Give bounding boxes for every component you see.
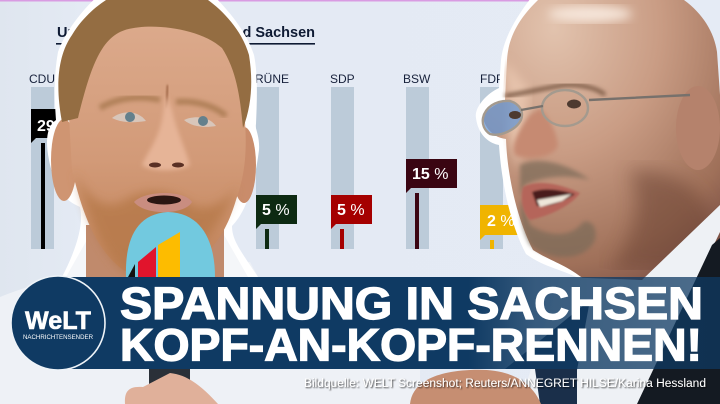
photo: right politician [410, 0, 720, 404]
headline [120, 278, 703, 370]
shirt [520, 205, 720, 404]
logo subtitle: NACHRICHTENSENDER [23, 334, 94, 341]
tie [505, 300, 590, 404]
neck [86, 225, 224, 278]
eyes [112, 112, 216, 127]
mouth [522, 183, 580, 220]
eyes [509, 100, 581, 119]
collar left [66, 238, 96, 277]
right hand [410, 370, 541, 404]
bar: CDU [29, 72, 75, 249]
hand [125, 373, 218, 404]
headline line one: SPANNUNG IN SACHSEN [120, 278, 703, 329]
bar: SDP: 5 % [337, 202, 365, 219]
bar: BSW: BSW [403, 72, 431, 86]
bar: Grüne: 5 % [262, 202, 290, 219]
head skin [483, 0, 720, 280]
chart heading [56, 25, 315, 45]
top accent line [0, 0, 720, 2]
eyebrow shading [505, 85, 605, 96]
headline line two: KOPF-AN-KOPF-RENNEN! [120, 320, 702, 370]
hair [58, 0, 251, 128]
forehead crease [166, 85, 168, 108]
nose [514, 108, 558, 158]
headline banner [58, 277, 720, 369]
mouth [134, 193, 192, 212]
ear left [51, 119, 77, 201]
nose [142, 95, 190, 170]
photo: left politician [0, 0, 420, 404]
bar: CDU: CDU [29, 72, 55, 86]
WELT logo [11, 276, 105, 370]
face [68, 20, 246, 275]
bar: FDP: 2 % [487, 213, 515, 230]
chart heading: Umfragen [57, 25, 125, 41]
shirt and body [0, 262, 420, 404]
bar: BSW [403, 72, 457, 249]
moustache and goatee [520, 161, 596, 257]
microphone [126, 212, 215, 277]
bar: SDP [330, 72, 372, 249]
logo wordmark: WeLT [25, 307, 91, 335]
bar: FDP: FDP [480, 72, 504, 86]
bar: FDP [480, 72, 525, 249]
white background corner [684, 0, 720, 95]
white cutout outline [47, 0, 259, 277]
party bar chart [29, 72, 525, 249]
white cutout outline [476, 0, 720, 280]
glasses [483, 90, 690, 135]
bar: CDU: 29 % [37, 118, 73, 135]
bar: BSW: 15 % [412, 166, 448, 183]
neck shading [505, 60, 720, 270]
image credit: Bildquelle: WELT Screenshot; Reuters/ANNEGRET HILSE/Karina Hessland [304, 378, 706, 390]
bar: Grüne: GRÜNE [246, 72, 289, 86]
ear [676, 86, 720, 170]
ear right [232, 127, 256, 203]
microphone handle [149, 365, 190, 390]
beard shading [74, 170, 238, 272]
eyebrows [100, 98, 226, 116]
collar right [218, 235, 248, 277]
bar: Grüne [246, 72, 297, 249]
head highlight [548, 6, 632, 22]
bar: SDP: SDP [330, 72, 355, 86]
suit jacket [637, 238, 720, 404]
chart heading: Land Sachsen [217, 25, 315, 41]
